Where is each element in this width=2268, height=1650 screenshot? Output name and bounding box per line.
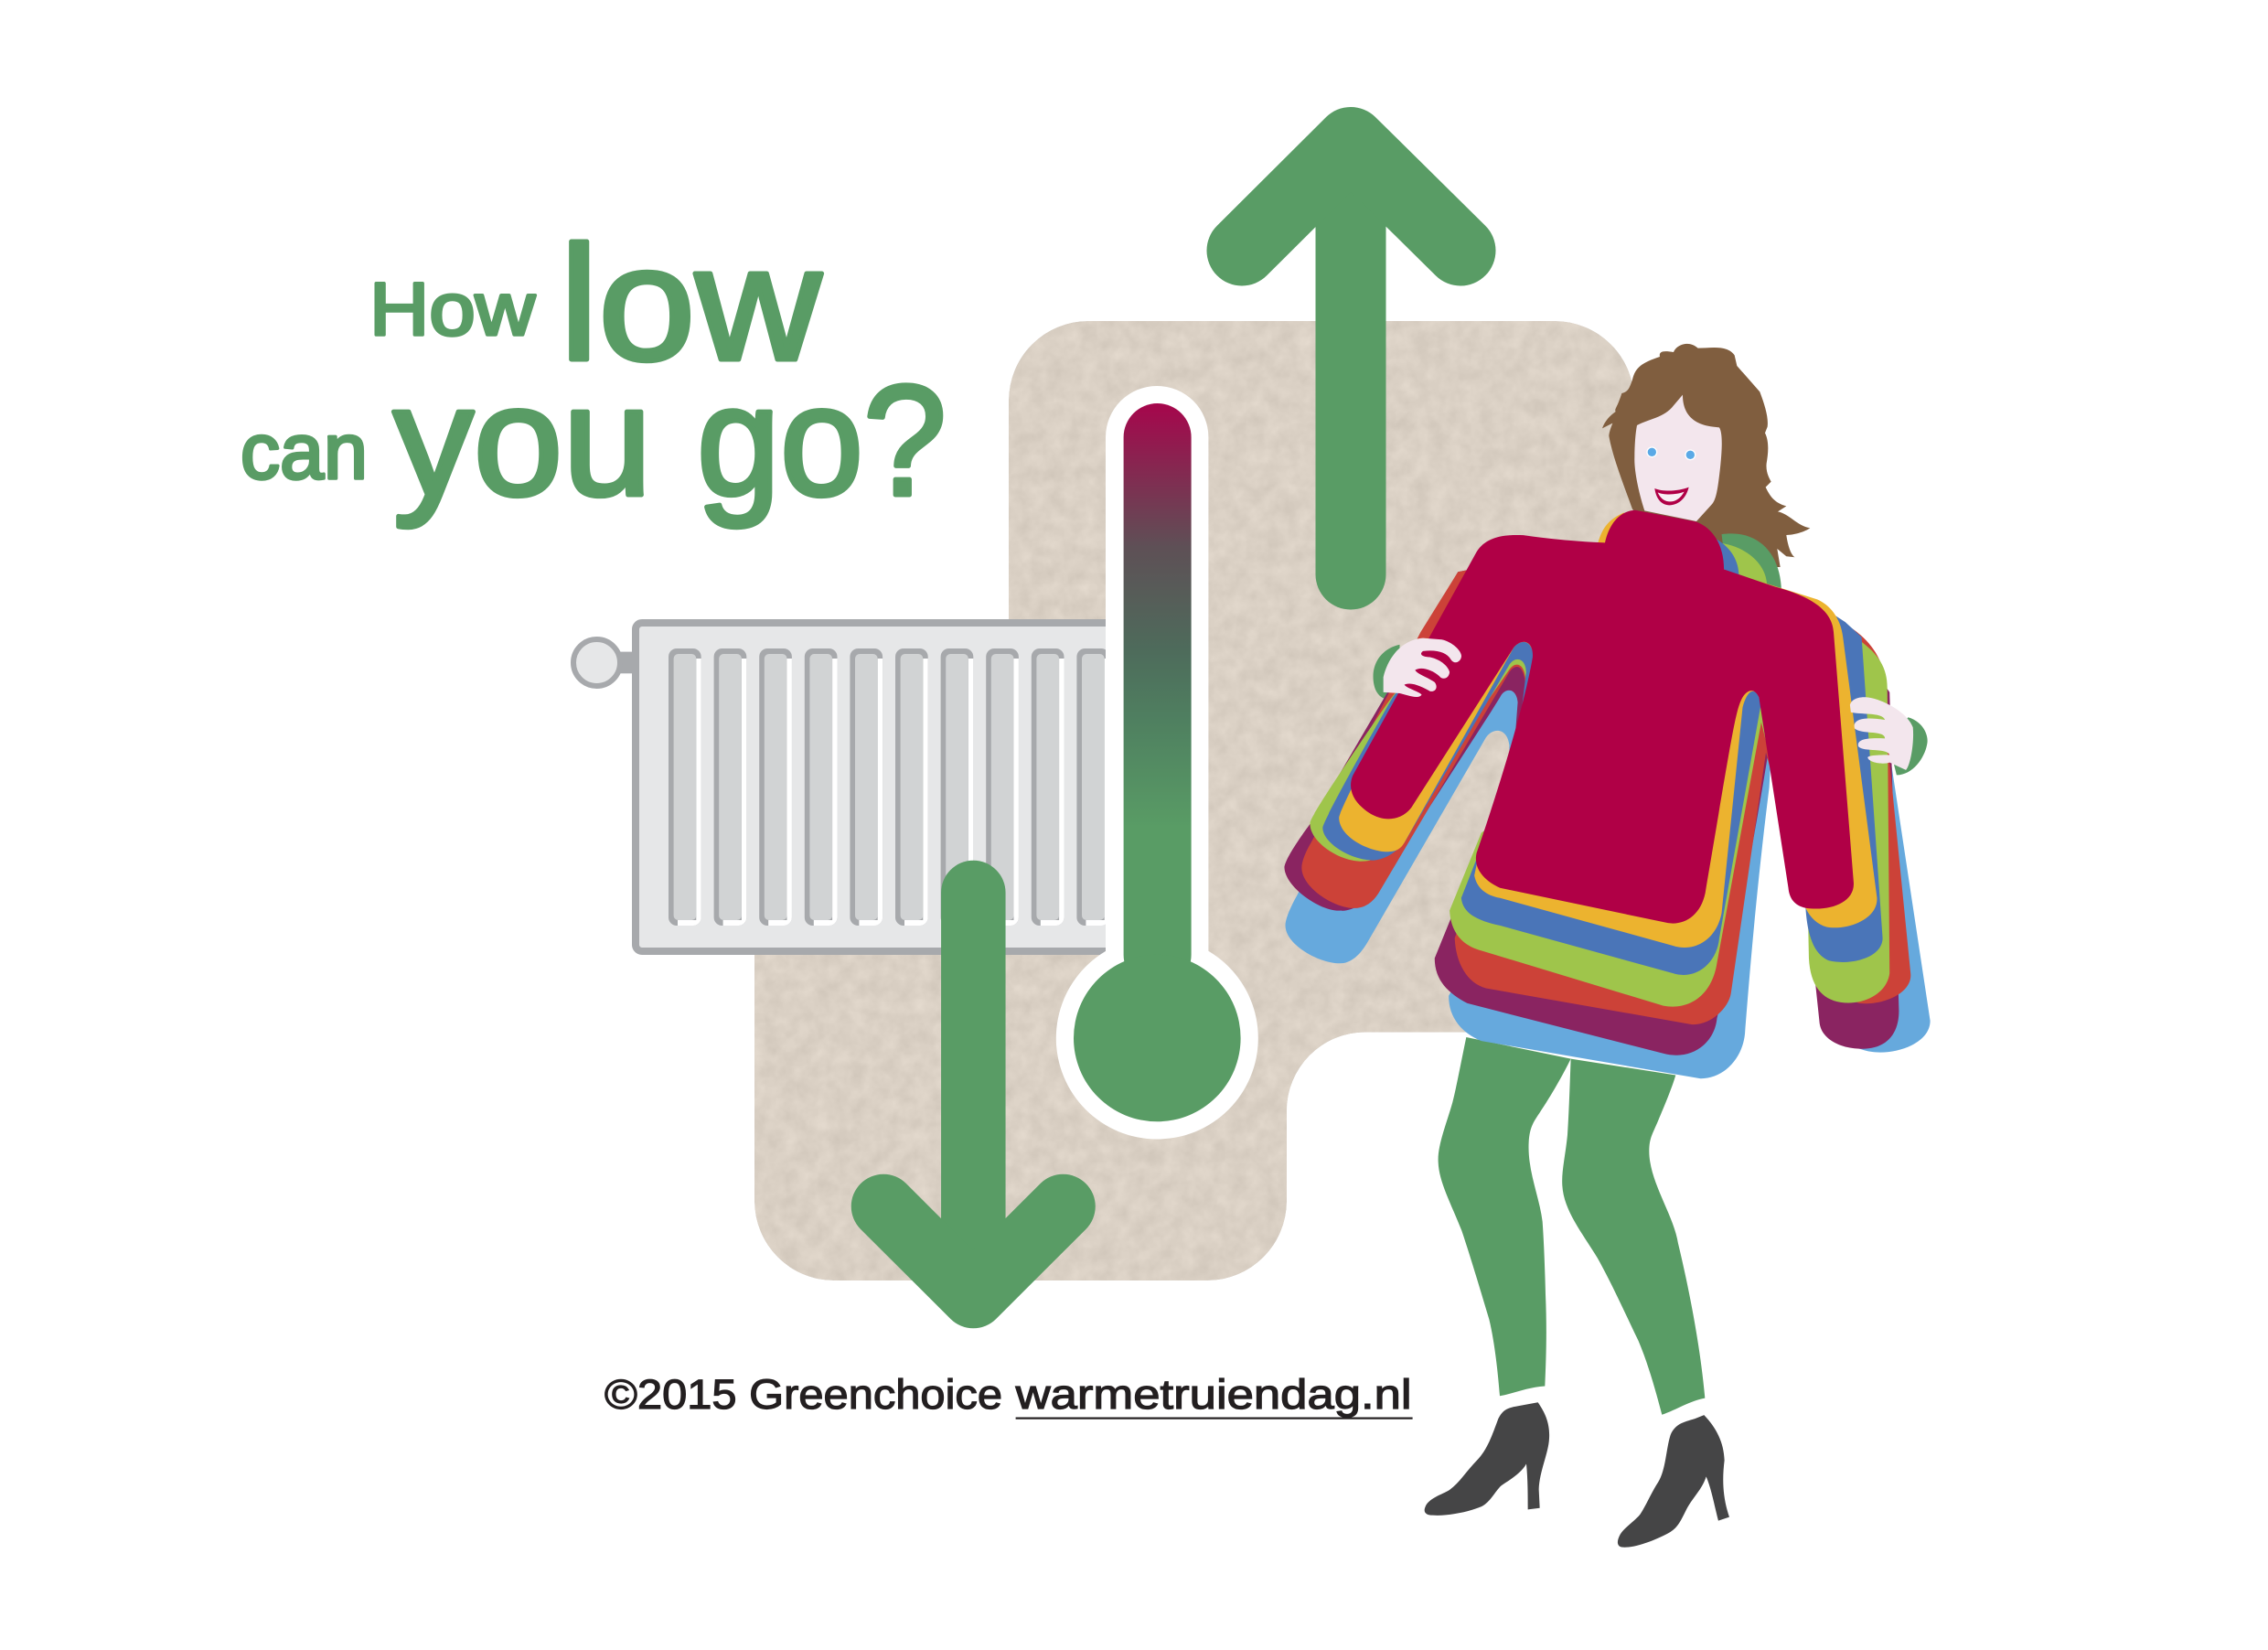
jumper: light blue bbox=[1286, 547, 1931, 1078]
radiator fins bbox=[669, 648, 1109, 926]
legs bbox=[1439, 1037, 1705, 1415]
jumper: purple bbox=[1284, 547, 1899, 1055]
jumper: yellow bbox=[1339, 512, 1877, 948]
title: How low can you go? bbox=[241, 212, 947, 529]
stacked jumpers bbox=[1284, 510, 1931, 1078]
jumper: red bbox=[1301, 547, 1910, 1024]
jumper: blue bbox=[1322, 531, 1883, 975]
shoes bbox=[1425, 1402, 1729, 1548]
thermometer bulb bbox=[1074, 955, 1241, 1121]
panel: beige textured background shape bbox=[754, 321, 1634, 1280]
credit line bbox=[604, 1371, 1413, 1420]
title: How low can you go?: you bbox=[393, 353, 652, 529]
title: How low can you go?: can bbox=[241, 408, 368, 496]
thermometer bbox=[1056, 386, 1258, 1140]
hand: right bbox=[1850, 697, 1913, 770]
radiator panel bbox=[636, 623, 1148, 951]
title: How low can you go?: low bbox=[560, 212, 821, 394]
credit line: ©2015 Greenchoice bbox=[604, 1371, 1002, 1418]
thermometer gradient column bbox=[1124, 403, 1192, 989]
arrow: down bbox=[883, 893, 1063, 1296]
arrow: up bbox=[1242, 143, 1460, 574]
title: How low can you go?: How bbox=[369, 268, 536, 351]
woman figure bbox=[1284, 344, 1931, 1548]
head: hair and face bbox=[1602, 344, 1810, 567]
hand: left bbox=[1384, 638, 1461, 697]
thermometer outer white casing bbox=[1056, 386, 1258, 1140]
jumper: lime green bbox=[1310, 542, 1889, 1007]
icon: radiator bbox=[573, 623, 1148, 951]
title: How low can you go?: go? bbox=[697, 353, 947, 529]
credit line: warmetruiendag.nl bbox=[1014, 1371, 1412, 1418]
green body and cuffs bbox=[1374, 533, 1928, 775]
radiator valve bbox=[573, 639, 635, 686]
jumper: crimson bbox=[1351, 510, 1854, 924]
